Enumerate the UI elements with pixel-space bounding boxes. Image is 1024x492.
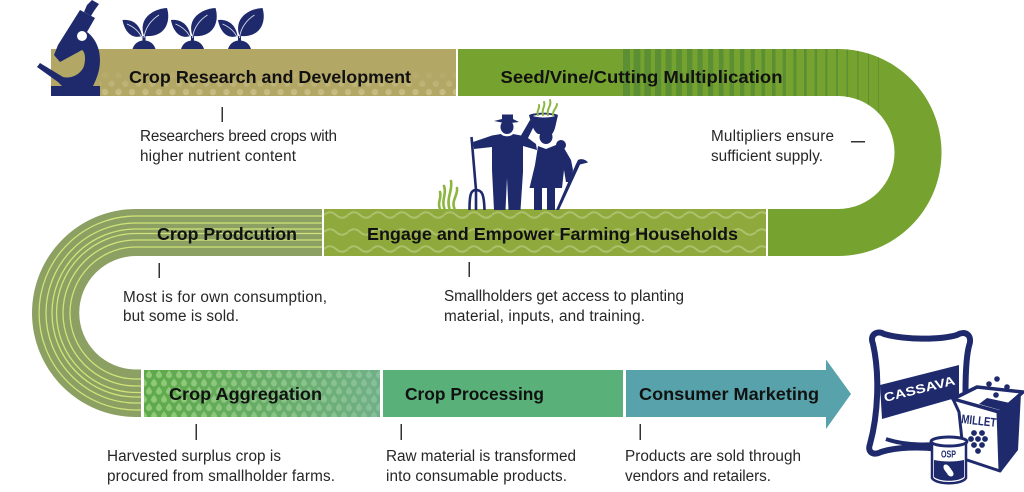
text: crop research description [140, 107, 337, 165]
text: aggregation description: procured from smallholder farms. [107, 468, 335, 485]
panel: Crop Processing band: Crop Processing [405, 384, 544, 404]
icon: packaged products [869, 332, 1023, 483]
panel: Crop Research and Development band [51, 49, 456, 96]
text: farming households description: Smallholders get access to planting [444, 288, 684, 305]
text: multiplication description [711, 128, 865, 165]
text: crop production description [123, 263, 327, 325]
text: aggregation description: Harvested surplus crop is [107, 448, 281, 465]
icon: cassava sack [869, 332, 970, 454]
text: crop production description: but some is sold. [123, 308, 239, 325]
panel: Crop Processing band [383, 370, 623, 417]
panel: Engage and Empower Farming Households band [324, 209, 766, 256]
text: marketing description: vendors and retailers. [625, 468, 771, 485]
icon: farmer couple [470, 100, 588, 210]
text: farming households description: material, inputs, and training. [444, 308, 645, 325]
icon: grass tuft [439, 181, 457, 209]
text: processing description: Raw material is transformed [386, 448, 576, 465]
text: farming households description [444, 262, 684, 325]
text: marketing description: Products are sold through [625, 448, 801, 465]
text: aggregation description [107, 424, 335, 485]
arrow: Consumer Marketing: Consumer Marketing [639, 384, 819, 404]
text: multiplication description: Multipliers ensure [711, 128, 834, 145]
text: crop production description: Most is for own consumption, [123, 289, 327, 306]
text: multiplication description: sufficient supply. [711, 148, 823, 165]
icon: cassava sack: CASSAVA [882, 374, 957, 405]
icon: millet box: MILLET [961, 412, 997, 430]
text: processing description: into consumable products. [386, 468, 567, 485]
panel: Crop Production curved band: Crop Prodcution [157, 224, 297, 244]
text: crop research description: higher nutrient content [140, 148, 297, 165]
panel: Engage and Empower Farming Households band: Engage and Empower Farming Households [367, 224, 738, 244]
panel: Crop Aggregation band [144, 370, 380, 417]
panel: Crop Aggregation band: Crop Aggregation [169, 384, 322, 404]
icon: OSP can [931, 437, 967, 483]
panel: Crop Production curved band [32, 209, 322, 417]
icon: millet box [953, 376, 1023, 472]
panel: Seed/Vine/Cutting Multiplication curved band: Seed/Vine/Cutting Multiplication [500, 67, 782, 87]
text: crop research description: Researchers breed crops with [140, 128, 337, 145]
panel: Crop Research and Development band: Crop Research and Development [129, 67, 411, 87]
text: processing description [386, 424, 576, 485]
panel: Seed/Vine/Cutting Multiplication curved band [458, 49, 942, 256]
text: marketing description [625, 424, 801, 485]
icon: OSP can: OSP [941, 450, 956, 460]
arrow: Consumer Marketing [626, 360, 851, 429]
icon: microscope [37, 0, 100, 96]
icon: row of three seedlings [122, 8, 264, 49]
